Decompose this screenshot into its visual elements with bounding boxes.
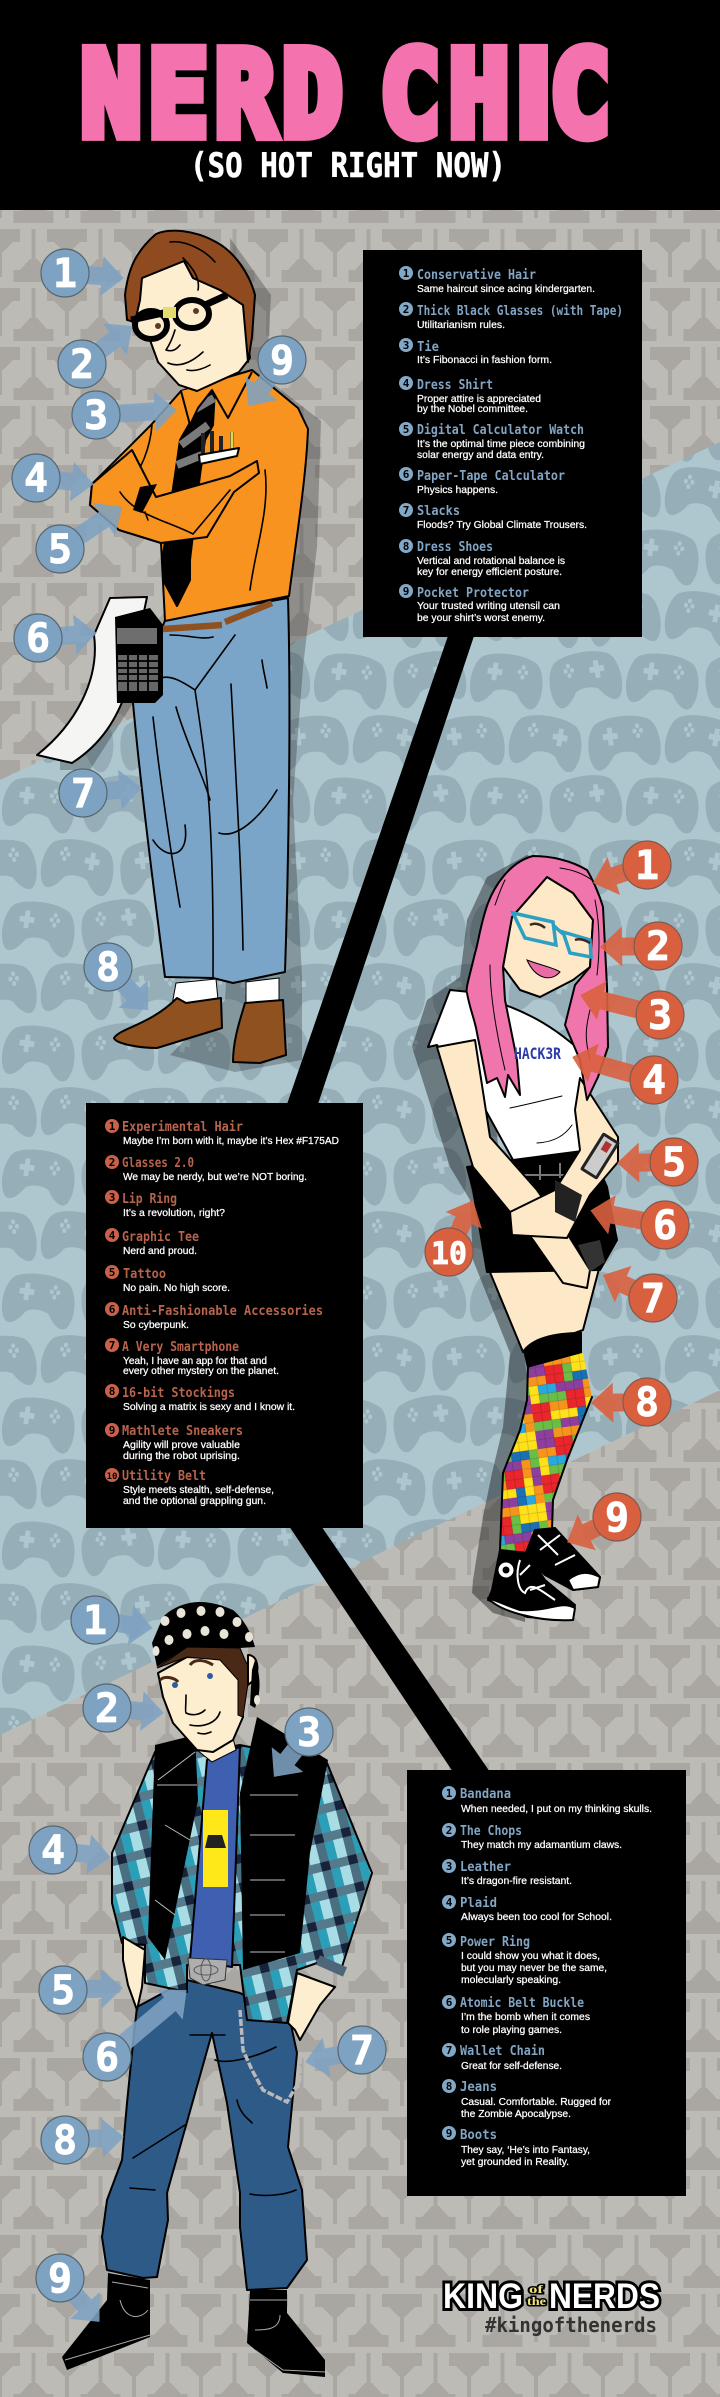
- item 9: Boots: [460, 2128, 497, 2143]
- girl drop shadow: [412, 855, 560, 1622]
- item 3: Lip Ring: [122, 1192, 177, 1207]
- logo: King of the Nerds: of: [529, 2282, 544, 2296]
- callout 7: 7: [350, 2028, 374, 2074]
- face: [158, 1657, 243, 1752]
- callout 2: 2: [70, 342, 94, 388]
- stocking band: [523, 1332, 582, 1368]
- item 8: Casual. Comfortable. Rugged for: [461, 2097, 612, 2108]
- item 5: 5: [403, 423, 409, 436]
- connector bar: girl panel to biker panel: [285, 1520, 492, 1775]
- item 8: Dress Shoes: [417, 540, 493, 555]
- item 6: I’m the bomb when it comes: [461, 2012, 590, 2023]
- item 5: No pain. No high score.: [123, 1283, 230, 1294]
- item 5: Tattoo: [123, 1267, 166, 1282]
- tie stripes: [177, 398, 214, 465]
- item 3: [105, 1190, 225, 1219]
- item 8: Jeans: [460, 2080, 497, 2095]
- item 1: [105, 1119, 339, 1147]
- collar: [181, 372, 252, 425]
- callout 9: 9: [605, 1495, 629, 1541]
- item 4: [399, 376, 541, 415]
- calculator: [115, 608, 163, 703]
- eyes and features: [160, 1660, 220, 1734]
- callout 7: 7: [71, 771, 95, 817]
- cuffs: [318, 1960, 345, 1972]
- item 4: 4: [403, 377, 410, 390]
- item 5: It’s the optimal time piece combining: [417, 439, 585, 450]
- jeans creases: [130, 2035, 296, 2195]
- item 5: but you may never be the same,: [461, 1963, 607, 1974]
- item 9: 9: [446, 2127, 452, 2140]
- item 9: They say, ‘He’s into Fantasy,: [461, 2145, 590, 2156]
- item 10: 10: [107, 1472, 117, 1482]
- item 1: Bandana: [460, 1787, 511, 1802]
- item 4: Nerd and proud.: [123, 1246, 197, 1257]
- pink hair: [467, 856, 608, 1100]
- pocket protector: [199, 431, 239, 464]
- callout 6: [83, 1975, 200, 2081]
- callout 4: 4: [41, 1828, 65, 1874]
- crossed arms: [90, 450, 259, 543]
- item 3: 3: [403, 339, 409, 352]
- callout 9: [232, 336, 306, 418]
- right hand: [288, 1973, 335, 2040]
- nose and mouth lines: [166, 242, 215, 371]
- callout 6: [14, 613, 99, 662]
- callouts: nerd: [12, 249, 306, 1024]
- logo: King of the Nerds: KING: [443, 2277, 523, 2316]
- figure: biker nerd: [62, 1602, 372, 2377]
- front sneaker: [488, 1550, 575, 1620]
- right boot: [247, 2290, 325, 2377]
- callout 6: [587, 1191, 689, 1249]
- item 8: Vertical and rotational balance is: [417, 556, 565, 567]
- glasses: [131, 295, 227, 339]
- item 2: Utilitarianism rules.: [417, 320, 505, 331]
- callout 3: [258, 1708, 333, 1789]
- item 1: 1: [446, 1787, 453, 1800]
- item 1: Same haircut since acing kindergarten.: [417, 284, 595, 295]
- item 8: 16-bit Stockings: [122, 1386, 235, 1401]
- wallet chain: [240, 2010, 300, 2102]
- item 7: Wallet Chain: [460, 2044, 545, 2059]
- item 8: key for energy efficient posture.: [417, 567, 562, 578]
- item 7: [442, 2043, 562, 2072]
- item 2: [442, 1823, 622, 1851]
- item 4: by the Nobel committee.: [417, 404, 528, 415]
- tie: [163, 388, 215, 606]
- item 2: 2: [403, 303, 409, 316]
- callout 7: [595, 1257, 677, 1322]
- shirt sleeve line: [132, 425, 266, 590]
- item 6: [105, 1302, 323, 1331]
- logo: King of the Nerds: the: [527, 2294, 547, 2308]
- tetris stocking: [501, 1353, 592, 1552]
- callout 3: 3: [84, 393, 108, 439]
- callout 9: [36, 2254, 114, 2335]
- belt: [163, 603, 272, 629]
- item 2: 2: [109, 1156, 115, 1169]
- item 7: 7: [403, 504, 409, 517]
- item 5: molecularly speaking.: [461, 1975, 561, 1986]
- face: [131, 261, 250, 391]
- item 2: Glasses 2.0: [122, 1156, 194, 1171]
- atomic belt buckle: [188, 1958, 227, 1985]
- callout 3: [72, 390, 178, 439]
- item 8: [442, 2079, 612, 2120]
- item 7: Great for self-defense.: [461, 2061, 562, 2072]
- callout 3: 3: [648, 993, 672, 1039]
- item 2: [399, 302, 623, 331]
- item 6: So cyberpunk.: [123, 1320, 189, 1331]
- item 8: [399, 539, 565, 578]
- callout 5: [39, 1966, 124, 2014]
- item 4: Dress Shirt: [417, 378, 493, 393]
- vest stitching: [155, 1752, 298, 1952]
- item 9: be your shirt’s worst enemy.: [417, 613, 545, 624]
- item 9: Mathlete Sneakers: [122, 1424, 243, 1439]
- panel: girl list: [86, 1103, 363, 1528]
- back sneaker: [525, 1528, 600, 1590]
- arm with tattoo: [510, 1078, 618, 1238]
- callout 10: [425, 1192, 491, 1276]
- title: I: [515, 26, 552, 163]
- item 1: Conservative Hair: [417, 268, 536, 283]
- blue t-shirt: [190, 1747, 240, 1967]
- arm with hand at thigh: [437, 1040, 590, 1288]
- item 8: Solving a matrix is sexy and I know it.: [123, 1402, 295, 1413]
- item 7: Slacks: [417, 504, 460, 519]
- paper tape: [37, 597, 147, 763]
- plaid shirt: [112, 1745, 372, 2023]
- item 10: Utility Belt: [122, 1469, 206, 1484]
- skull bandana: [152, 1602, 260, 1708]
- callout 8: [84, 943, 163, 1024]
- item 1: Experimental Hair: [122, 1120, 243, 1135]
- callout 6: 6: [26, 616, 50, 662]
- logo: King of the Nerds: NERDS: [549, 2277, 660, 2316]
- left sock: [172, 979, 218, 1005]
- callout 5: 5: [48, 527, 72, 573]
- item 5: 5: [446, 1934, 452, 1947]
- item 6: to role playing games.: [461, 2025, 562, 2036]
- item 4: 4: [109, 1229, 116, 1242]
- item 5: [105, 1265, 230, 1294]
- callout 5: [36, 490, 133, 573]
- item 3: [442, 1859, 572, 1887]
- callout 9: 9: [48, 2256, 72, 2302]
- callout 7: 7: [641, 1276, 665, 1322]
- item 2: 2: [446, 1824, 452, 1837]
- callout 2: [58, 310, 144, 388]
- item 6: [442, 1995, 590, 2036]
- callout 4: [12, 454, 96, 504]
- item 10: [105, 1468, 274, 1507]
- mouth: [527, 960, 560, 978]
- callout 6: 6: [95, 2035, 119, 2081]
- callout 1: [41, 249, 126, 298]
- item 1: 1: [109, 1120, 116, 1133]
- item 3: It’s Fibonacci in fashion form.: [417, 355, 552, 366]
- item 4: 4: [446, 1896, 453, 1909]
- item 2: Thick Black Glasses (with Tape): [417, 304, 623, 319]
- item 4: Graphic Tee: [122, 1230, 199, 1245]
- callout 8: [41, 2116, 125, 2164]
- item 9: during the robot uprising.: [123, 1451, 240, 1462]
- item 4: Always been too cool for School.: [461, 1912, 612, 1923]
- item 5: [442, 1933, 607, 1986]
- item 4: [105, 1228, 199, 1257]
- callout 4: 4: [24, 456, 48, 502]
- subtitle: (SO HOT RIGHT NOW): [190, 146, 506, 186]
- item 4: Proper attire is appreciated: [417, 394, 541, 405]
- hair strands: [490, 868, 599, 1070]
- callout 2: 2: [95, 1686, 119, 1732]
- title: C: [550, 26, 610, 163]
- callout 9: [558, 1493, 641, 1560]
- pants: [132, 598, 289, 983]
- shirt folds: [510, 1096, 572, 1143]
- item 7: [105, 1338, 279, 1377]
- item 8: the Zombie Apocalypse.: [461, 2109, 571, 2120]
- watch: [133, 484, 157, 513]
- item 7: A Very Smartphone: [122, 1340, 239, 1355]
- t-shirt: [428, 990, 590, 1160]
- vest right: [240, 1717, 328, 1970]
- item 6: 6: [446, 1996, 453, 2009]
- figure: hacker girl: [412, 855, 620, 1622]
- item 6: [399, 467, 565, 496]
- item 4: [442, 1895, 612, 1923]
- callout 1: 1: [83, 1598, 107, 1644]
- item 9: Agility will prove valuable: [123, 1440, 240, 1451]
- item 4: Plaid: [460, 1896, 497, 1911]
- thigh: [487, 1265, 600, 1352]
- callout 8: 8: [635, 1380, 659, 1426]
- left shoe: [114, 998, 222, 1048]
- orange shirt: [90, 370, 308, 621]
- item 1: [399, 266, 595, 295]
- item 3: Tie: [417, 340, 439, 355]
- face: [503, 877, 593, 997]
- item 8: 8: [446, 2080, 452, 2093]
- smartphone: [578, 1240, 605, 1272]
- item 1: When needed, I put on my thinking skulls.: [461, 1804, 652, 1815]
- item 5: solar energy and data entry.: [417, 450, 544, 461]
- item 7: Floods? Try Global Climate Trousers.: [417, 520, 587, 531]
- callout 6: 6: [653, 1203, 677, 1249]
- item 9: [105, 1423, 243, 1462]
- item 8: 8: [403, 540, 409, 553]
- right boot trim: [250, 2300, 325, 2372]
- callout 3: [576, 976, 684, 1039]
- callout 8: 8: [53, 2118, 77, 2164]
- item 6: 6: [109, 1303, 116, 1316]
- item 3: It’s dragon-fire resistant.: [461, 1876, 572, 1887]
- item 2: We may be nerdy, but we’re NOT boring.: [123, 1172, 307, 1183]
- figure: classic nerd: [37, 231, 321, 1072]
- item 7: every other mystery on the planet.: [123, 1366, 279, 1377]
- callout 3: 3: [297, 1710, 321, 1756]
- shirt text: HACK3R: [514, 1044, 561, 1063]
- item 7: 7: [109, 1339, 115, 1352]
- hashtag: #kingofthenerds: [485, 2313, 657, 2337]
- connector bar: nerd panel to girl panel: [285, 630, 476, 1110]
- shorts and belt: [467, 1148, 617, 1272]
- hair: [125, 231, 255, 362]
- nerd drop shadow: [60, 238, 321, 1072]
- callout 5: [617, 1138, 698, 1186]
- left boot: [62, 2273, 150, 2370]
- wristband: [555, 1180, 582, 1222]
- item 6: Anti-Fashionable Accessories: [122, 1304, 323, 1319]
- right sock: [246, 978, 279, 1008]
- item 1: Maybe I’m born with it, maybe it’s Hex #F175AD: [123, 1136, 339, 1147]
- callout 2: [83, 1684, 166, 1733]
- callout 4: 4: [642, 1058, 666, 1104]
- callout 10: 10: [431, 1236, 467, 1272]
- callouts: girl: [425, 841, 698, 1560]
- callout 7: [59, 768, 144, 817]
- item 9: 9: [403, 585, 409, 598]
- belt detail: [500, 1163, 580, 1180]
- callouts: biker: [29, 1596, 386, 2335]
- pants creases: [153, 635, 277, 978]
- item 1: 1: [403, 267, 410, 280]
- header banner: [0, 0, 720, 210]
- item 9: Pocket Protector: [417, 586, 529, 601]
- item 5: Digital Calculator Watch: [417, 423, 584, 438]
- blue glasses: [513, 913, 591, 957]
- callout 1: 1: [635, 843, 659, 889]
- left hand: [123, 1937, 145, 2010]
- item 5: [399, 422, 585, 461]
- t-shirt emblem: [203, 1810, 228, 1887]
- left boot trim: [65, 2282, 150, 2360]
- item 10: Style meets stealth, self-defense,: [123, 1485, 274, 1496]
- item 2: [105, 1155, 307, 1183]
- item 8: 8: [109, 1385, 115, 1398]
- background: blue game-controller band: [0, 442, 720, 1735]
- item 6: 6: [403, 468, 410, 481]
- item 3: 3: [446, 1860, 452, 1873]
- item 6: Paper-Tape Calculator: [417, 469, 565, 484]
- logo: King of the Nerds: [443, 2277, 660, 2316]
- callout 4: [567, 1038, 678, 1104]
- callout 4: [29, 1826, 113, 1877]
- item 7: Yeah, I have an app for that and: [123, 1356, 267, 1367]
- callout 2: [600, 922, 682, 970]
- controller tattoo: [580, 1132, 620, 1180]
- arm fold lines: [120, 490, 230, 534]
- item 10: and the optional grappling gun.: [123, 1496, 266, 1507]
- item 6: Atomic Belt Buckle: [460, 1996, 584, 2011]
- callout 1: [587, 841, 671, 902]
- title: NERD CH: [81, 26, 509, 163]
- callout 2: 2: [646, 924, 670, 970]
- item 5: 5: [109, 1266, 115, 1279]
- item 3: 3: [109, 1191, 115, 1204]
- item 3: Leather: [460, 1860, 511, 1875]
- callout 5: 5: [662, 1140, 686, 1186]
- item 5: I could show you what it does,: [461, 1951, 600, 1962]
- panel: biker list: [407, 1770, 686, 2196]
- neck: [197, 1738, 236, 1762]
- right shoe: [233, 1000, 286, 1063]
- item 9: 9: [109, 1424, 115, 1437]
- callout 8: [591, 1378, 671, 1426]
- item 3: [399, 338, 552, 366]
- item 9: [399, 584, 560, 624]
- item 2: They match my adamantium claws.: [461, 1840, 622, 1851]
- panel: nerd list: [363, 250, 642, 637]
- item 6: Physics happens.: [417, 485, 498, 496]
- vest left: [148, 1735, 198, 1960]
- item 3: It’s a revolution, right?: [123, 1208, 225, 1219]
- callout 1: 1: [53, 251, 77, 297]
- eyes and brows: [530, 924, 590, 943]
- callout 8: 8: [96, 945, 120, 991]
- item 9: yet grounded in Reality.: [461, 2157, 569, 2168]
- stocking outline: [500, 1365, 592, 1550]
- item 1: [442, 1786, 652, 1815]
- item 9: Your trusted writing utensil can: [417, 601, 560, 612]
- item 7: 7: [446, 2044, 452, 2057]
- item 5: Power Ring: [460, 1935, 530, 1950]
- callout 7: [301, 2026, 386, 2082]
- item 8: [105, 1384, 295, 1413]
- callout 9: 9: [270, 338, 294, 384]
- item 2: The Chops: [460, 1824, 522, 1839]
- sideburn hair: [157, 1647, 250, 1717]
- callout 1: [71, 1596, 155, 1648]
- jeans: [102, 1980, 307, 2290]
- item 9: [442, 2126, 590, 2168]
- item 7: [399, 503, 587, 531]
- callout 5: 5: [51, 1968, 75, 2014]
- ear: [248, 1655, 257, 1685]
